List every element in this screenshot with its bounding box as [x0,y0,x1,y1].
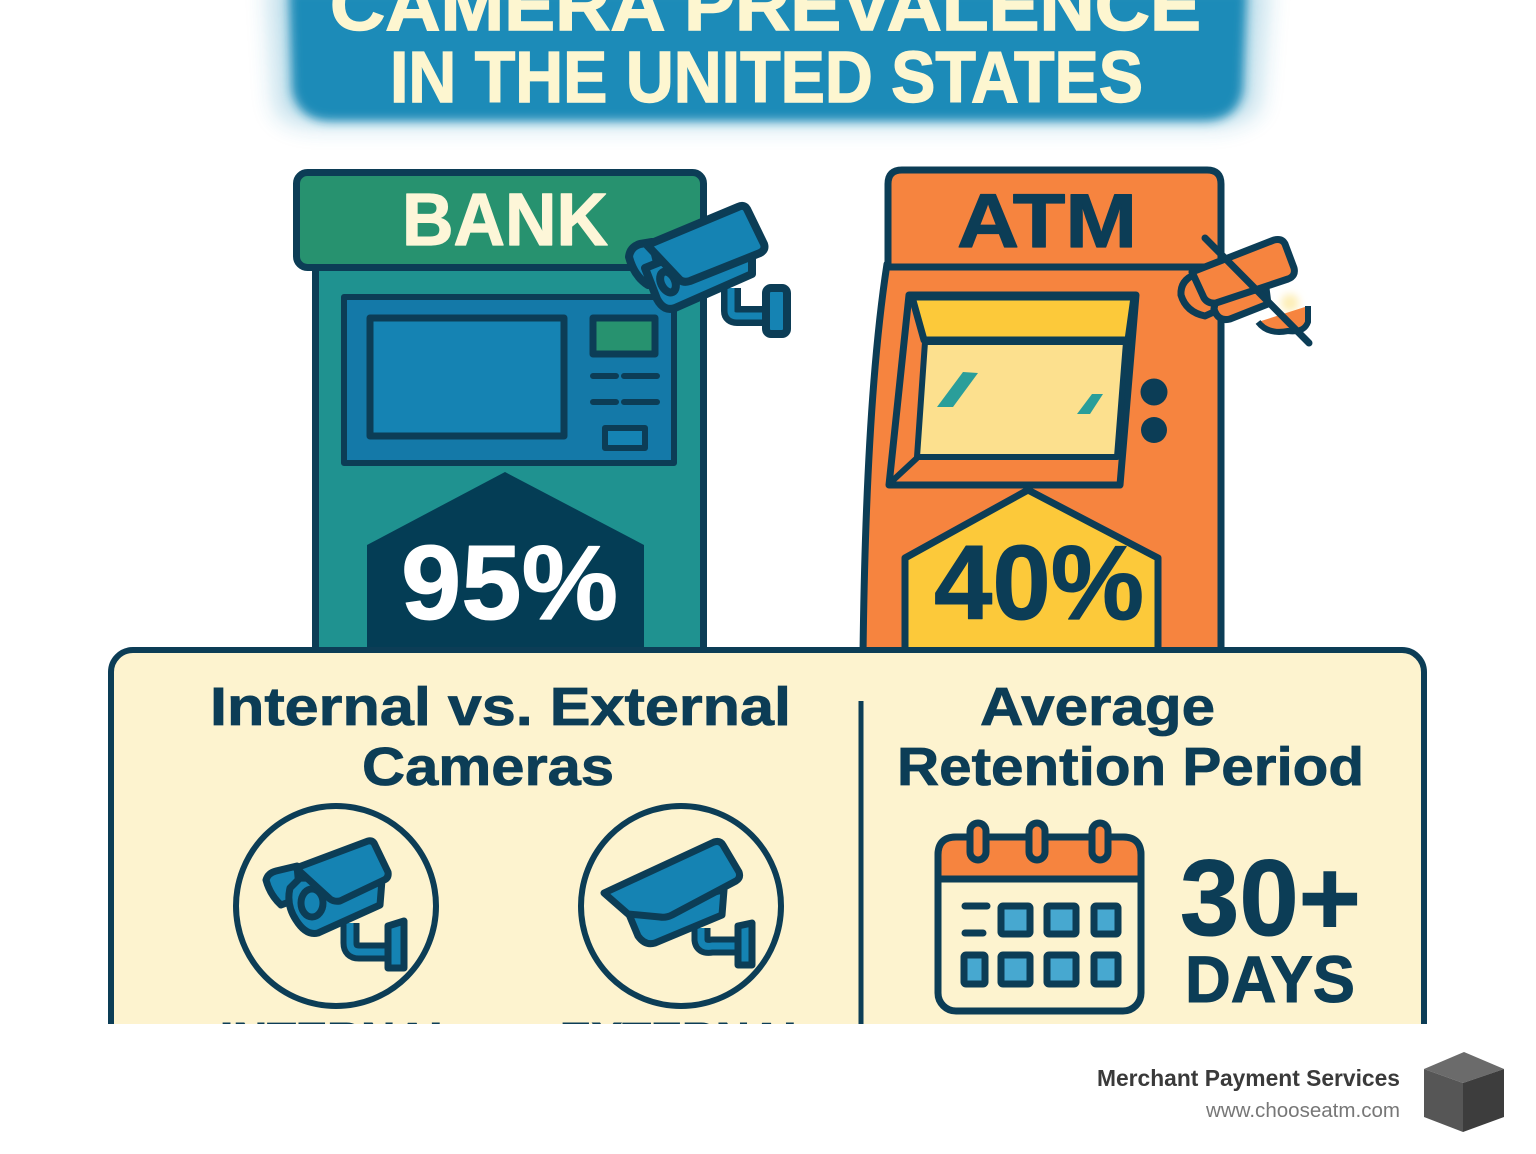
heading: internal vs external: Internal vs. External [210,677,791,737]
atm screen [889,295,1136,485]
atm buttons [1140,378,1168,443]
atm header sign [888,170,1221,267]
clipped camera labels: EXTERNAL [560,1014,812,1063]
panel: statistics card [111,650,1424,1070]
bank header sign [296,172,704,268]
bank 95% badge: 95% [401,524,618,642]
stat: 30+ days: 30+ [1180,837,1361,958]
stat: 30+ days [1182,859,1358,1003]
title text: IN THE UNITED STATES [390,38,1143,118]
heading: average retention period [900,688,1361,786]
icon: external camera [581,806,781,1006]
bank header sign: BANK [402,178,608,261]
bank control panel [344,297,674,463]
heading: average retention period: Retention Period [897,737,1364,797]
heading: internal vs external: Cameras [362,737,614,797]
panel: bank machine [296,172,787,657]
clipped camera labels: INTERNAL [220,1014,458,1063]
stat: 30+ days: DAYS [1185,942,1355,1016]
title banner [268,0,1268,126]
atm header sign: ATM [957,179,1137,264]
atm 40% badge [905,490,1158,652]
atm body [863,264,1221,655]
footer brand text [1097,1065,1400,1122]
icon: footer cube logo [1424,1052,1504,1132]
icon: internal camera [236,806,436,1006]
heading: internal vs external [214,686,788,786]
bank body [316,262,704,657]
heading: average retention period: Average [980,677,1215,737]
icon: bank security camera [629,206,787,334]
icon: calendar [938,823,1141,1011]
clipped camera labels [222,1022,794,1024]
icon: crossed-out atm camera [1181,238,1309,343]
panel: atm machine [863,170,1309,655]
footer brand text: Merchant Payment Services [1097,1065,1400,1091]
atm 40% badge: 40% [934,524,1144,642]
bank 95% badge [367,472,644,652]
footer brand text: www.chooseatm.com [1205,1100,1400,1122]
title text [330,0,1201,118]
